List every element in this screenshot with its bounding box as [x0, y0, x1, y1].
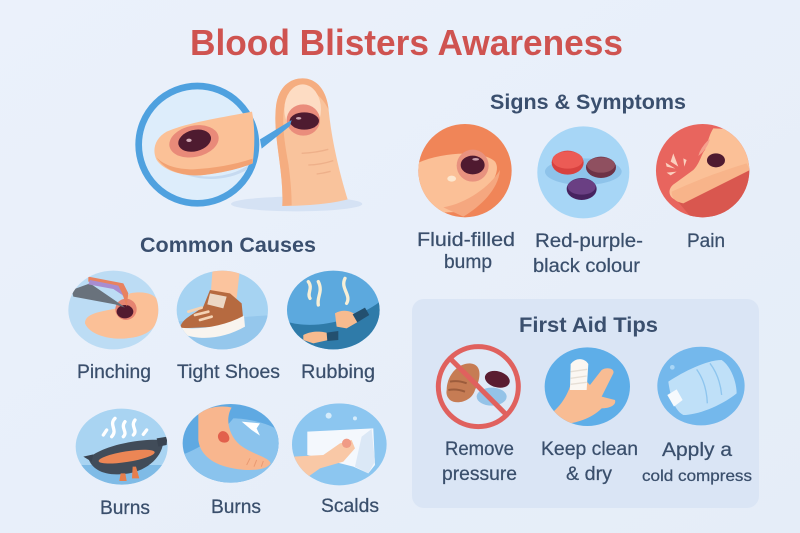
label: red-purple-black colour [533, 230, 643, 277]
label: apply a cold compress: cold compress [642, 468, 752, 485]
illustration: magnified finger blister [139, 78, 362, 211]
label: red-purple-black colour: black colour [533, 255, 641, 277]
icon: red purple black colours [537, 126, 629, 218]
icon: burns, foot [182, 403, 280, 483]
label: pain: Pain [687, 230, 725, 252]
icons: first aid tips [438, 346, 747, 427]
icon: keep clean and dry [543, 347, 632, 427]
icon: pain [653, 123, 753, 220]
icon: remove pressure [438, 346, 519, 427]
title: Blood Blisters Awareness [190, 22, 623, 63]
label: keep clean and dry [541, 438, 638, 485]
label: rubbing: Rubbing [301, 361, 375, 383]
icons: causes row one [67, 268, 380, 352]
label: fluid-filled bump: Fluid-filled [417, 229, 515, 251]
icon: fluid-filled bump [417, 123, 513, 218]
panel: first aid tips [412, 299, 759, 508]
label: apply a cold compress: Apply a [662, 439, 732, 461]
label: fluid-filled bump: bump [444, 251, 492, 273]
label: burns, pan: Burns [100, 497, 150, 519]
infographic [68, 28, 759, 514]
label: remove pressure [442, 438, 517, 485]
heading: common causes: Common Causes [140, 234, 316, 257]
label: remove pressure: Remove [445, 438, 514, 460]
label: scalds: Scalds [321, 495, 379, 517]
label: keep clean and dry: Keep clean [541, 438, 638, 460]
icon: burns, hot pan [73, 407, 170, 487]
label: keep clean and dry: & dry [566, 463, 612, 485]
label: pinching: Pinching [77, 361, 151, 383]
label: fluid-filled bump [417, 229, 515, 273]
label: burns, foot: Burns [211, 496, 261, 518]
heading: signs and symptoms: Signs & Symptoms [490, 91, 686, 114]
label: red-purple-black colour: Red-purple- [535, 230, 643, 252]
icon: cold compress [657, 347, 747, 427]
heading: first aid tips: First Aid Tips [519, 314, 658, 337]
icon: scalds [292, 403, 388, 487]
icons: causes row two [73, 403, 388, 487]
label: tight shoes: Tight Shoes [177, 361, 280, 383]
icons: signs and symptoms [417, 123, 753, 220]
icon: rubbing [287, 268, 380, 352]
icon: pinching [67, 268, 160, 350]
label: remove pressure: pressure [442, 463, 517, 485]
label: apply a cold compress [642, 439, 752, 485]
icon: tight shoes [176, 270, 268, 350]
